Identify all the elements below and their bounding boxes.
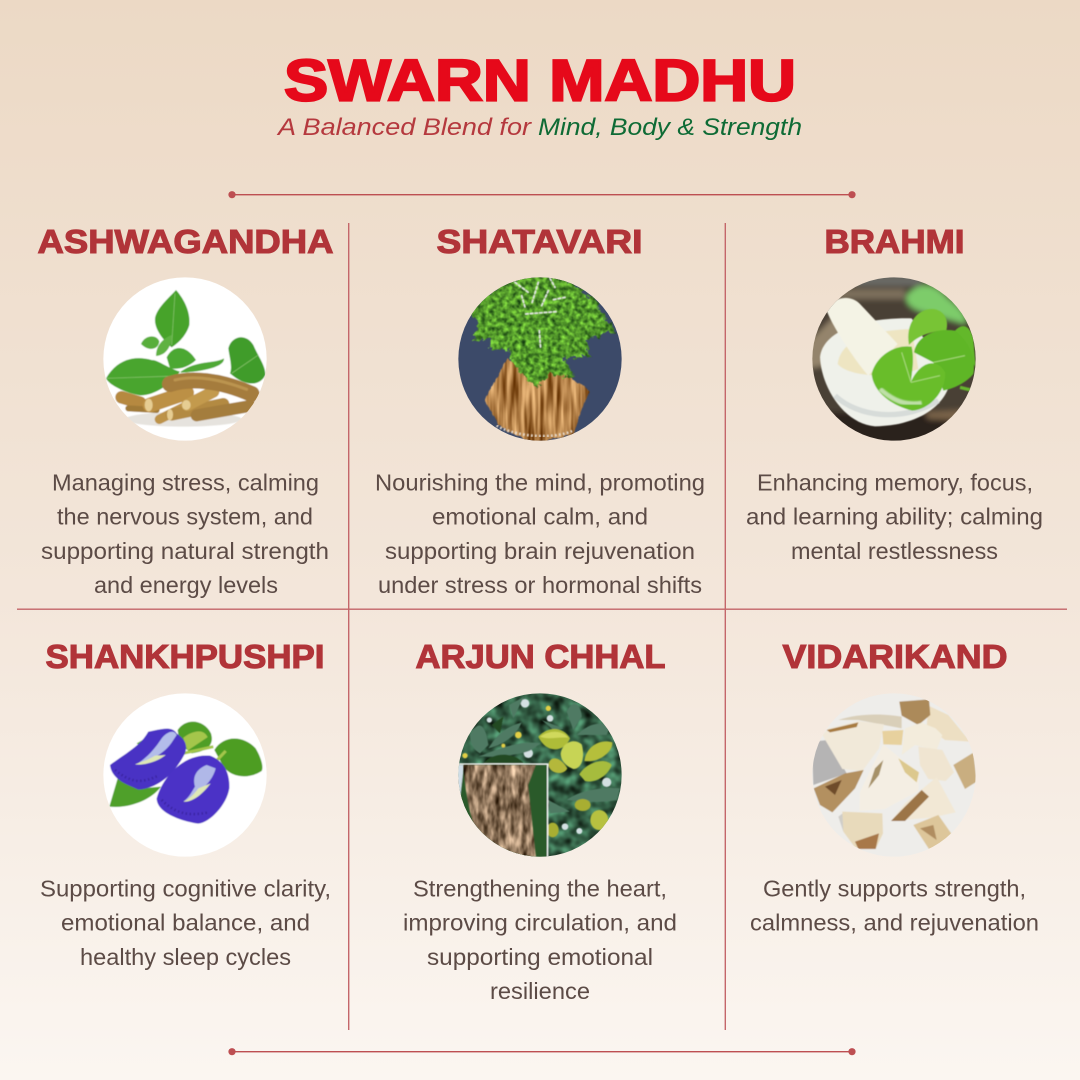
description: emotional balance, and — [61, 910, 310, 936]
description: emotional calm, and — [432, 504, 648, 530]
description: the nervous system, and — [57, 504, 313, 530]
description: supporting emotional — [427, 944, 653, 970]
description: and learning ability; calming — [746, 504, 1043, 530]
subtitle: A Balanced Blend for — [276, 114, 532, 141]
description: Enhancing memory, focus, — [757, 470, 1033, 496]
description: calmness, and rejuvenation — [750, 910, 1039, 936]
icon: butterfly pea flowers — [103, 694, 266, 856]
description: Supporting cognitive clarity, — [40, 876, 331, 902]
description: resilience — [490, 978, 590, 1004]
description: Strengthening the heart, — [413, 876, 667, 902]
subtitle — [276, 114, 802, 141]
description: Managing stress, calming — [52, 470, 319, 496]
icon: brahmi leaves and mortar — [812, 277, 976, 441]
description — [375, 470, 705, 598]
description: Nourishing the mind, promoting — [375, 470, 705, 496]
description — [40, 876, 331, 970]
heading: SHANKHPUSHPI — [46, 639, 324, 676]
description: supporting natural strength — [41, 538, 329, 564]
heading: ARJUN CHHAL — [416, 639, 666, 676]
panel: Shatavari — [375, 224, 705, 598]
icon: arjun tree, fruits and bark — [458, 693, 622, 857]
heading: VIDARIKAND — [782, 639, 1008, 676]
icon: ashwagandha roots and leaves — [103, 277, 267, 441]
heading: BRAHMI — [824, 224, 964, 261]
description: and energy levels — [94, 572, 278, 598]
bottom divider with dots — [228, 1048, 856, 1055]
description: under stress or hormonal shifts — [378, 572, 702, 598]
description — [750, 876, 1039, 936]
panel: Shankhpushpi — [40, 639, 331, 970]
heading: SHATAVARI — [436, 224, 642, 261]
panel: Brahmi — [746, 224, 1043, 564]
top divider with dots — [228, 191, 856, 198]
description: mental restlessness — [791, 538, 998, 564]
description: Gently supports strength, — [763, 876, 1026, 902]
panel: Arjun Chhal — [403, 639, 677, 1004]
heading: ASHWAGANDHA — [38, 224, 334, 261]
panel: Vidarikand — [750, 639, 1039, 936]
icon: vidarikand chunks — [812, 694, 976, 856]
subtitle: Mind, Body & Strength — [538, 114, 802, 141]
description: supporting brain rejuvenation — [385, 538, 695, 564]
description: healthy sleep cycles — [80, 944, 291, 970]
icon: shatavari plant — [458, 277, 622, 441]
panel: Ashwagandha — [38, 224, 334, 598]
description: improving circulation, and — [403, 910, 677, 936]
description — [746, 470, 1043, 564]
description — [41, 470, 329, 598]
description — [403, 876, 677, 1004]
title: SWARN MADHU — [284, 49, 796, 114]
